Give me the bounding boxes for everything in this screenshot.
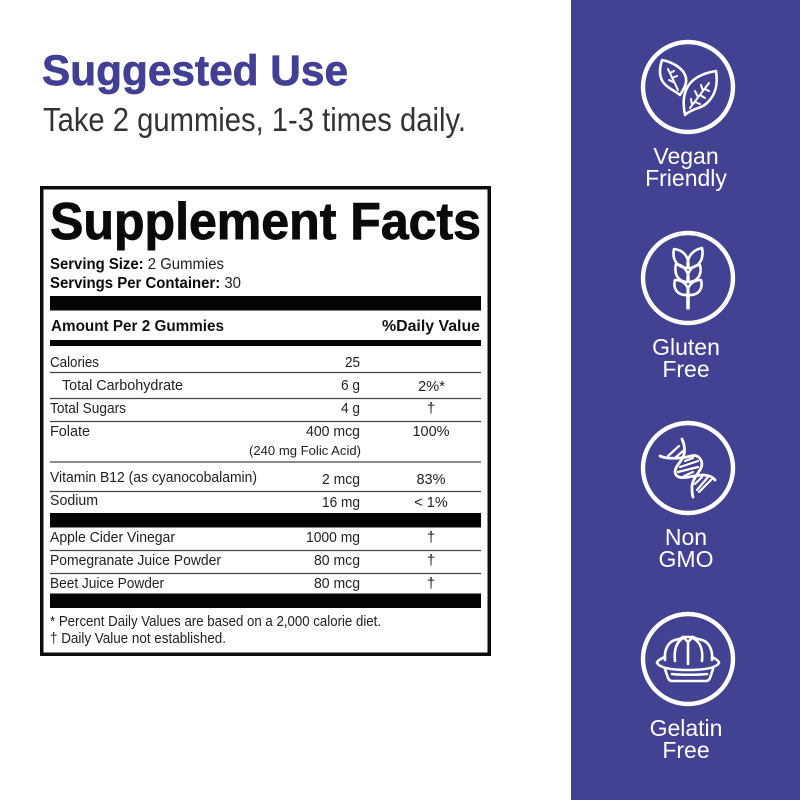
row: pomegranate juice powder: Pomegranate Juice Powder (50, 552, 221, 569)
label: Gluten Free: Gluten (652, 334, 720, 360)
row: pomegranate juice powder: † (427, 552, 435, 569)
row: vitamin B12 (50, 469, 446, 488)
thick bar: header top (50, 296, 481, 310)
thick bar: table bottom (50, 594, 481, 608)
row: vitamin B12: 83% (416, 472, 446, 488)
text: serving size: Serving Size: 2 Gummies (50, 256, 224, 273)
row: beet juice powder: Beet Juice Powder (50, 575, 164, 592)
label: Non GMO: GMO (659, 546, 713, 572)
heading: Suggested Use: Suggested Use (42, 47, 348, 95)
footnote: percent daily values: * Percent Daily Values are based on a 2,000 calorie diet. (50, 613, 381, 630)
row: sodium (50, 492, 448, 511)
thick bar: mid section (50, 513, 481, 528)
row: total carbohydrate: Total Carbohydrate (62, 377, 183, 394)
row: folate (50, 423, 450, 458)
row: total carbohydrate: 6 g (341, 377, 360, 394)
row: total carbohydrate (62, 377, 445, 395)
label: Gluten Free (652, 334, 720, 382)
row: vitamin B12: 2 mcg (322, 471, 360, 488)
column heading: amount: Amount Per 2 Gummies (51, 318, 224, 335)
thick bar: header bottom (50, 340, 481, 346)
label: Vegan Friendly: Vegan (653, 143, 719, 169)
row: calories (50, 354, 360, 371)
panel: supplement facts (42, 188, 489, 654)
row: folate: 400 mcg (306, 423, 360, 440)
row: total carbohydrate: 2%* (418, 378, 445, 395)
icon: non-GMO DNA helix (643, 423, 733, 513)
label: Gelatin Free (650, 715, 722, 763)
label: Vegan Friendly: Friendly (645, 165, 727, 191)
row: beet juice powder: † (427, 575, 435, 592)
row: total sugars (50, 400, 435, 417)
row: pomegranate juice powder (50, 552, 435, 569)
row: folate: (240 mg Folic Acid) (249, 443, 361, 458)
row: total sugars: 4 g (341, 400, 360, 417)
title: Supplement Facts: Supplement Facts (50, 193, 481, 251)
text block: dosage instruction: Take 2 gummies, 1-3 times daily. (43, 101, 466, 138)
text: servings per container: Servings Per Container: 30 (50, 275, 241, 292)
label: Gelatin Free: Free (662, 737, 710, 763)
column heading: daily value: %Daily Value (382, 318, 480, 335)
row: apple cider vinegar: 1000 mg (306, 529, 360, 546)
row: beet juice powder (50, 575, 435, 592)
label: Vegan Friendly (645, 143, 727, 191)
row: folate: Folate (50, 423, 90, 440)
icon: vegan leaves (643, 42, 733, 132)
row: sodium: 16 mg (322, 494, 360, 511)
row: apple cider vinegar: † (427, 529, 435, 546)
row: apple cider vinegar: Apple Cider Vinegar (50, 529, 175, 546)
row: apple cider vinegar (50, 529, 435, 546)
icon: gelatin mold (643, 614, 733, 704)
row: beet juice powder: 80 mcg (314, 575, 360, 592)
icon: gluten wheat (643, 233, 733, 323)
row: sodium: Sodium (50, 492, 98, 509)
label: Non GMO (659, 524, 713, 572)
label: Non GMO: Non (665, 524, 707, 550)
row: calories: Calories (50, 354, 99, 371)
label: Gluten Free: Free (662, 356, 710, 382)
row: sodium: < 1% (414, 495, 448, 511)
label: Gelatin Free: Gelatin (650, 715, 722, 741)
row: folate: 100% (412, 424, 450, 440)
footnote: daily value not established: † Daily Value not established. (50, 630, 226, 647)
row: vitamin B12: Vitamin B12 (as cyanocobalamin) (50, 469, 257, 486)
row: total sugars: † (427, 400, 435, 417)
row: pomegranate juice powder: 80 mcg (314, 552, 360, 569)
panel: purple sidebar (571, 0, 800, 800)
row: calories: 25 (345, 354, 360, 371)
row: total sugars: Total Sugars (50, 400, 126, 417)
